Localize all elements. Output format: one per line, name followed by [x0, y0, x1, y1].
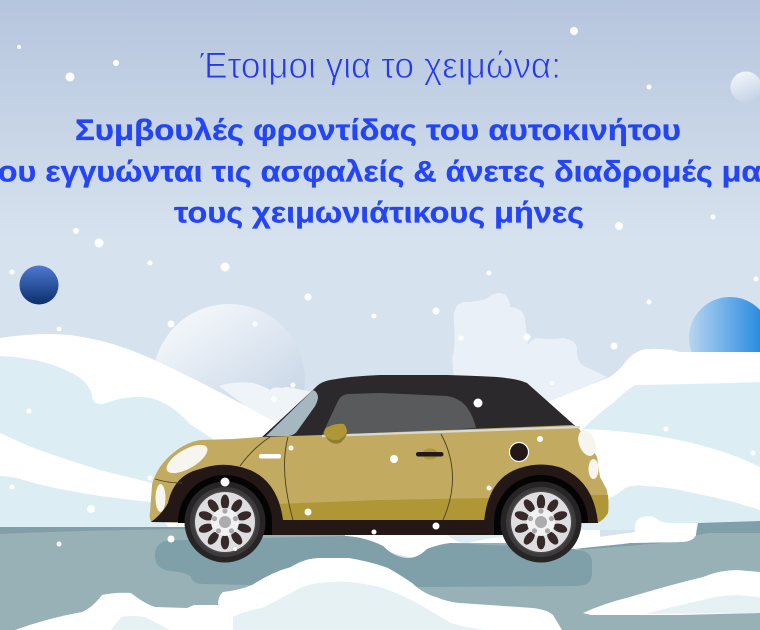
snow hill: left light blue lower	[0, 476, 170, 530]
mirror shadow	[325, 433, 347, 444]
car windshield	[266, 390, 318, 436]
cloud: right of roof	[452, 293, 607, 405]
rear arch inner	[494, 475, 588, 535]
tail light upper	[575, 428, 599, 458]
front wheel arch	[151, 465, 283, 530]
rear wheel arch	[484, 464, 598, 535]
sphere: bright blue	[689, 297, 760, 379]
light blue patch under the car	[446, 534, 505, 544]
front wheel	[184, 482, 266, 562]
title: light line: Έτοιμοι για το χειμώνα:	[199, 45, 561, 86]
snow hill: right light blue	[583, 382, 760, 467]
headlight	[162, 439, 212, 479]
cloud: behind windshield	[219, 382, 313, 430]
snow hill: lower right light blue	[570, 485, 760, 530]
door and hood seams	[155, 434, 453, 520]
fuel cap	[510, 442, 528, 462]
belt line trim	[322, 427, 580, 436]
side mirror	[324, 424, 347, 440]
snow under the car	[340, 530, 600, 560]
car	[150, 375, 608, 562]
car rocker panel	[270, 520, 500, 535]
car lower body band	[276, 495, 608, 524]
car roof	[262, 375, 580, 440]
snow drift: bottom center pale	[233, 582, 485, 630]
subtitle	[0, 114, 760, 230]
snow hill: left light blue upper	[0, 356, 222, 500]
snow hill: left white	[0, 334, 300, 527]
front handle highlight	[259, 454, 281, 458]
sphere: small white	[730, 72, 760, 102]
snow drift: bottom right white	[583, 570, 760, 615]
ground: dark ice stripe	[0, 527, 200, 534]
snow hill: right white	[480, 349, 760, 530]
snow bump right	[574, 516, 698, 549]
snow drift: bottom center white	[15, 558, 562, 630]
rear wheel	[500, 482, 582, 562]
ground: ice	[0, 527, 760, 630]
snow drift: bottom left pale	[111, 616, 170, 630]
car body	[150, 425, 608, 525]
ground: car shadow	[155, 536, 592, 587]
car side window	[322, 393, 476, 435]
snow hill: left white wedge	[0, 433, 152, 502]
subtitle line 1: Συμβουλές φροντίδας του αυτοκινήτου	[75, 114, 681, 147]
fog light	[156, 484, 166, 512]
snow drift: bottom right pale	[645, 595, 760, 614]
front arch inner	[178, 475, 272, 535]
rear door handle	[416, 448, 444, 460]
background sky	[0, 0, 760, 240]
subtitle line 3: τους χειμωνιάτικους μήνες	[174, 196, 584, 230]
sphere: dark blue	[20, 266, 58, 304]
tail light lower	[588, 459, 598, 479]
sphere: large pale	[153, 304, 305, 456]
ground: right dark band	[572, 521, 760, 550]
